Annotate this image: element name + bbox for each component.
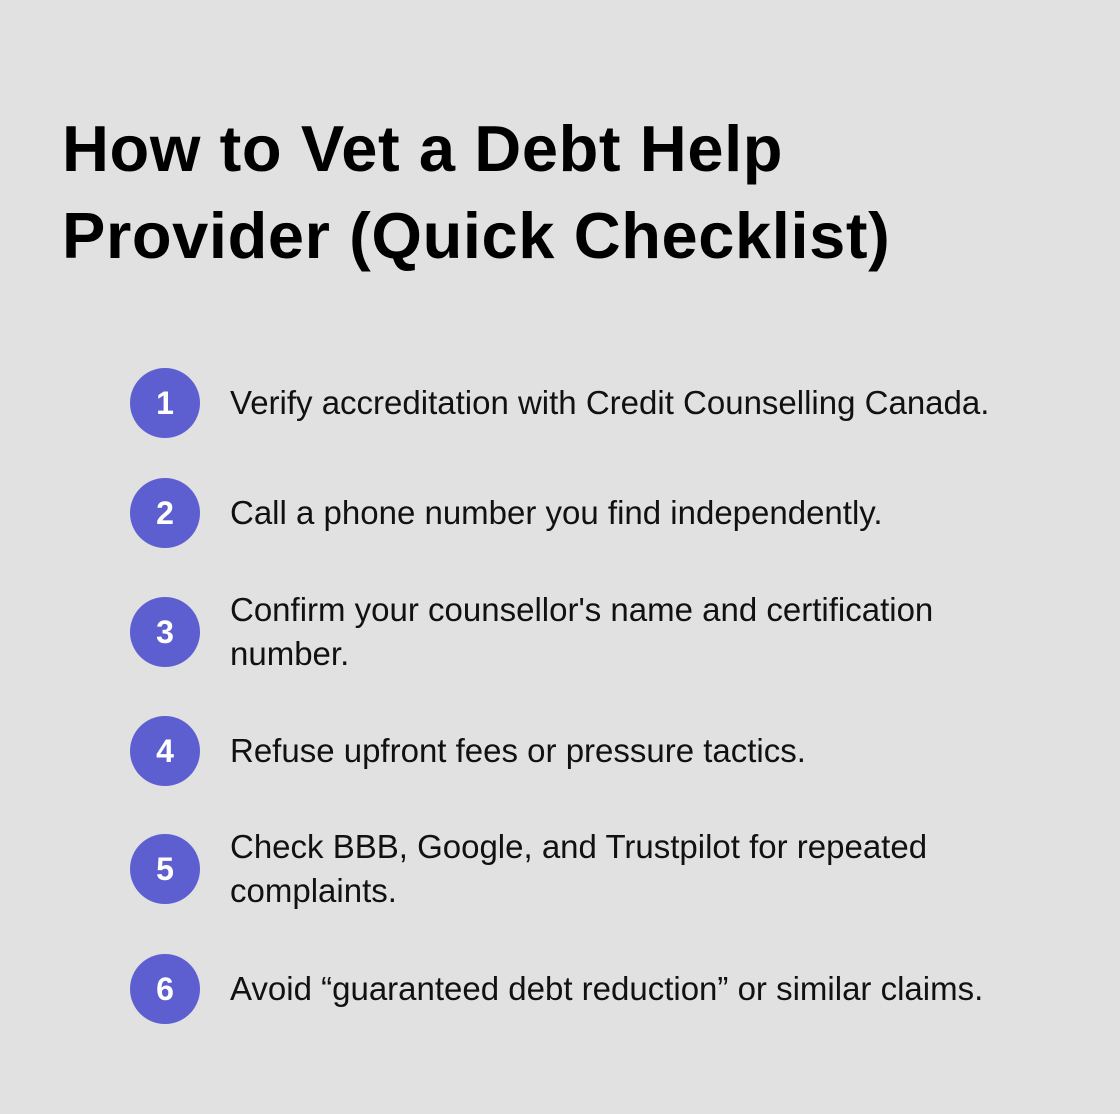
item 6: 6 bbox=[156, 971, 174, 1007]
item 4: 4 bbox=[156, 733, 174, 769]
title: How to Vet a Debt Help bbox=[62, 112, 783, 185]
title: Provider (Quick Checklist) bbox=[62, 199, 890, 272]
item 4: Refuse upfront fees or pressure tactics. bbox=[230, 732, 806, 769]
item 1: 1 bbox=[156, 385, 174, 421]
item 2: 2 bbox=[156, 495, 174, 531]
title bbox=[62, 112, 890, 272]
item 2: Call a phone number you find independently. bbox=[230, 494, 883, 531]
item 6: Avoid “guaranteed debt reduction” or similar claims. bbox=[230, 970, 983, 1007]
item 2 bbox=[130, 478, 883, 548]
item 1 bbox=[130, 368, 989, 438]
item 4 bbox=[130, 716, 806, 786]
item 1: Verify accreditation with Credit Counselling Canada. bbox=[230, 384, 989, 421]
item 3: Confirm your counsellor's name and certification number. bbox=[230, 591, 933, 672]
item 6 bbox=[130, 954, 983, 1024]
item 5: Check BBB, Google, and Trustpilot for repeated complaints. bbox=[230, 828, 927, 909]
item 3: 3 bbox=[156, 614, 174, 650]
item 5: 5 bbox=[156, 851, 174, 887]
